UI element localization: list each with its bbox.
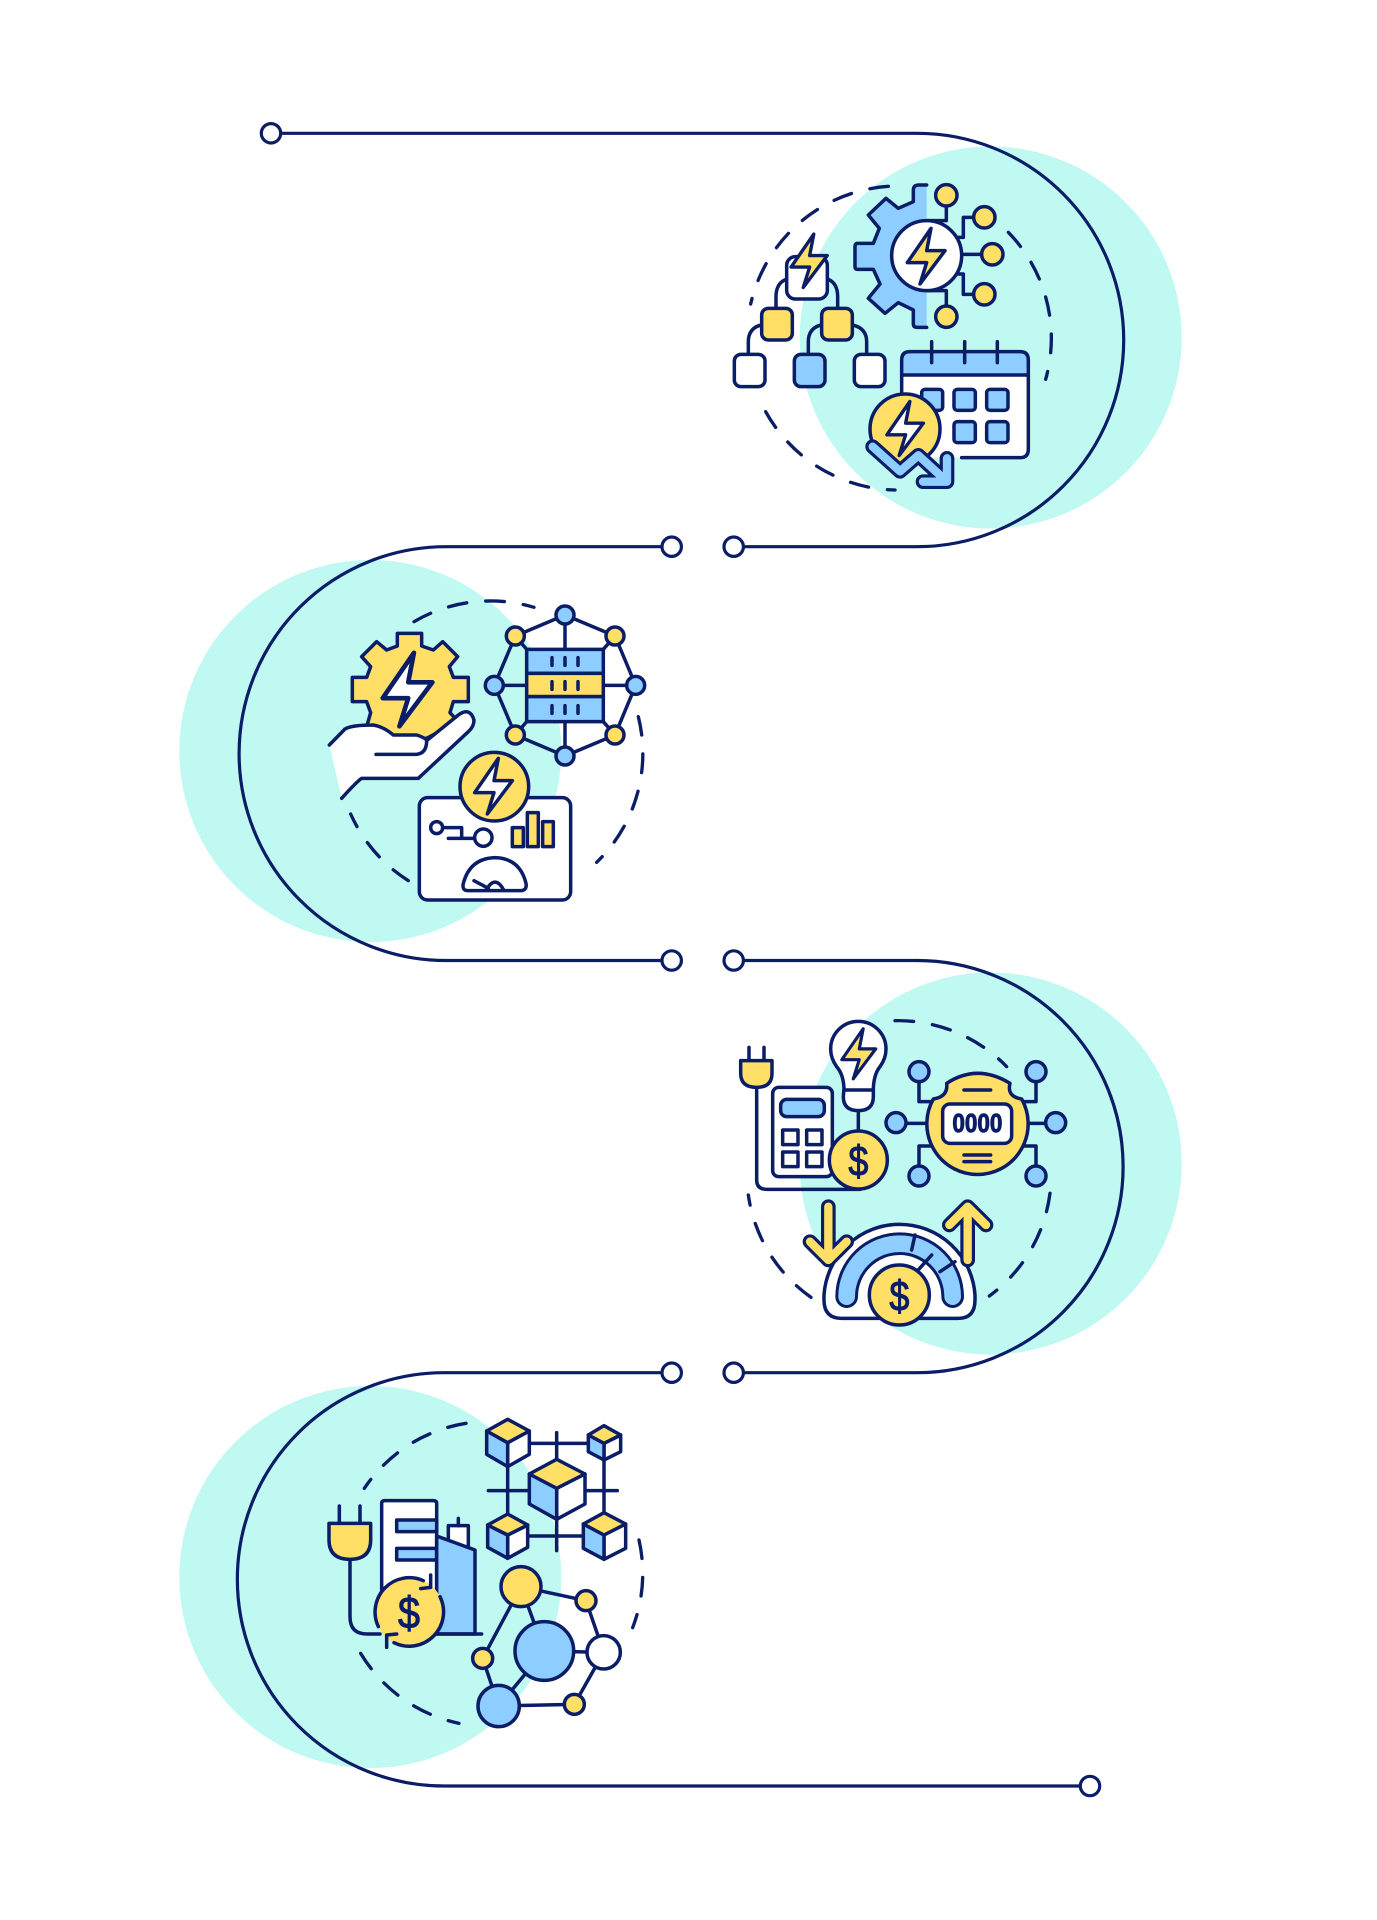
dashed ring (748, 1021, 1050, 1297)
dashed ring (751, 186, 1051, 490)
meter reading: 0000 (952, 1108, 1002, 1138)
dollar sign: $ (889, 1272, 910, 1320)
panel: step 2 icons (329, 601, 645, 900)
icon: smart meter (886, 1062, 1066, 1186)
panel: step 3 icons (741, 1021, 1066, 1325)
icon: plug with calculator (741, 1047, 860, 1189)
dollar sign: $ (398, 1589, 420, 1638)
teal circle step 2 (179, 560, 561, 942)
icon: blockchain cubes (487, 1419, 626, 1559)
icon: energy dashboard (419, 752, 571, 900)
timeline connector (237, 124, 1124, 1796)
icon: calendar with falling energy (870, 342, 1028, 482)
dashed ring (361, 1423, 643, 1723)
icon: gear with bolt (855, 185, 1003, 327)
teal circle step 4 (179, 1386, 561, 1768)
icon: light bulb with price (829, 1021, 887, 1189)
panel: step 4 icons (329, 1419, 643, 1727)
icon: gear in hand (329, 633, 474, 798)
icon: data server network (485, 606, 645, 765)
icon: cost gauge with arrows (810, 1207, 986, 1325)
dollar sign: $ (848, 1137, 869, 1185)
teal circle step 3 (800, 972, 1182, 1354)
icon: node network (473, 1567, 620, 1727)
teal circle step 1 (800, 146, 1182, 528)
icon: hierarchy chart (734, 234, 885, 387)
panel: step 1 icons (734, 185, 1051, 490)
dashed ring (351, 601, 643, 881)
icon: plug and building (329, 1501, 482, 1647)
